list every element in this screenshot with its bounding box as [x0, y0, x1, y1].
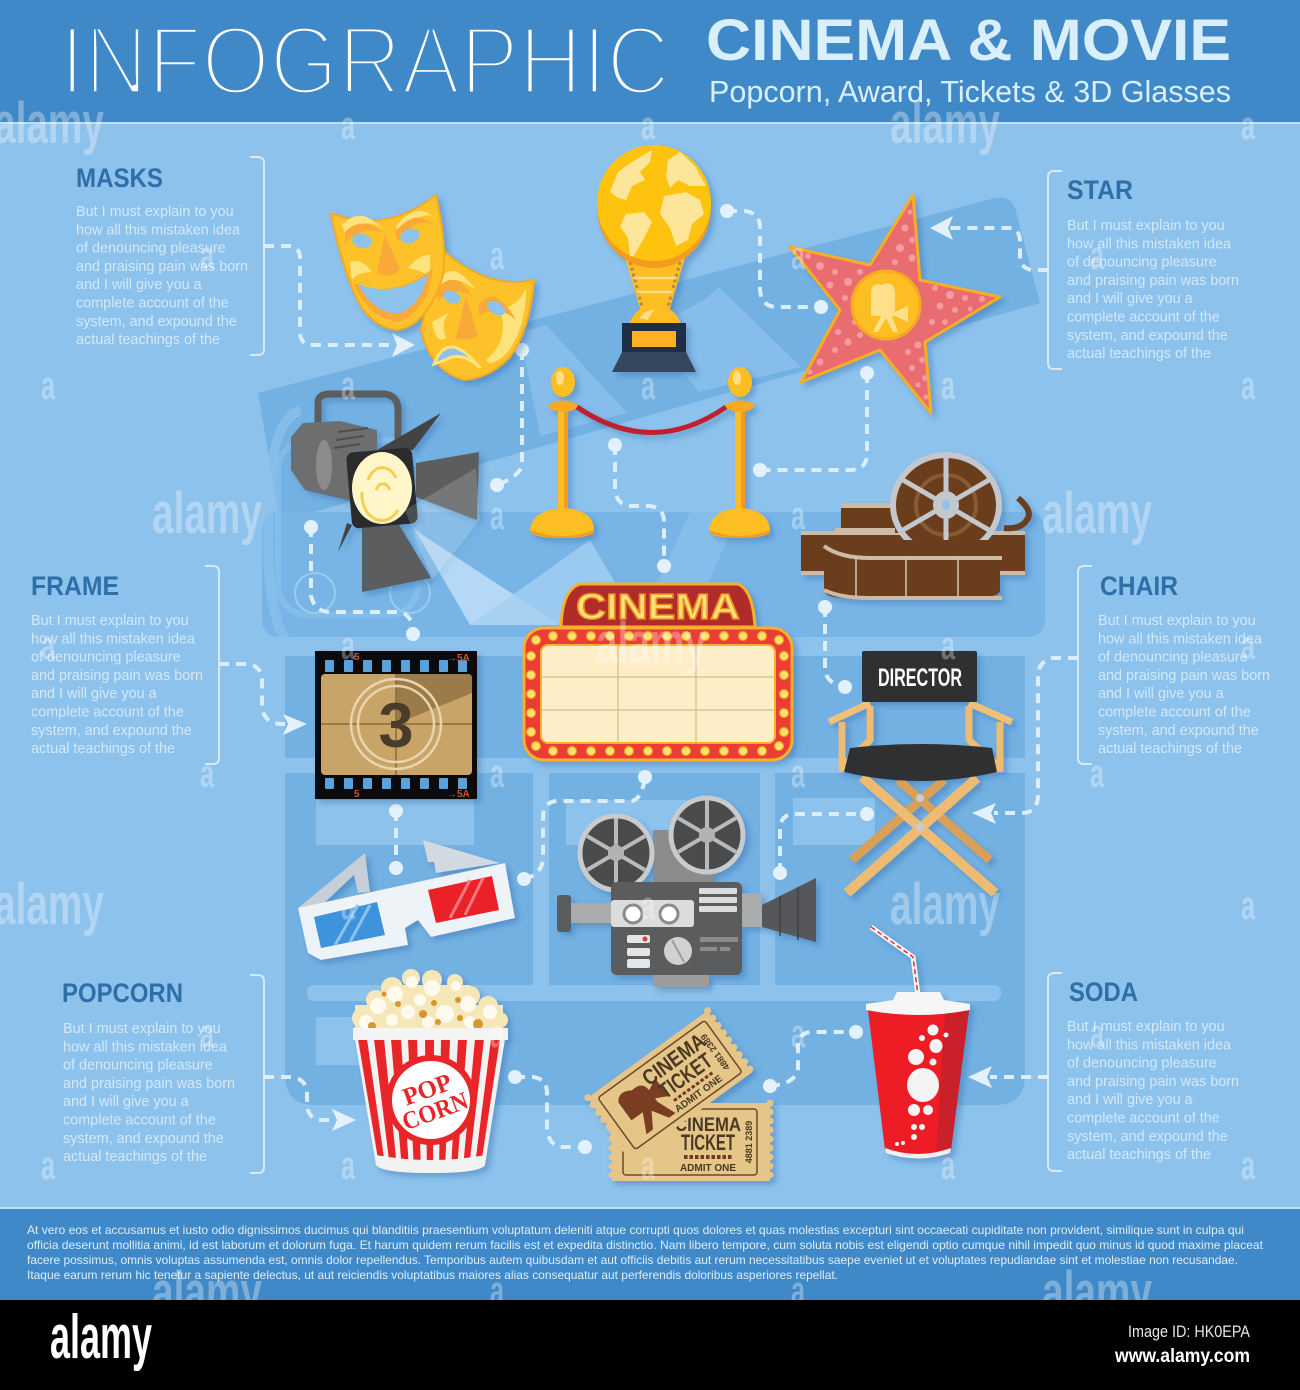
watermark layer: a: [791, 234, 805, 278]
upper ticket: ADMIT ONE: [673, 1073, 725, 1115]
text block: star: [1048, 171, 1239, 369]
watermark layer: alamy: [1042, 1260, 1152, 1325]
text block: soda: and I will give you a: [1067, 1092, 1193, 1108]
connector: popcorn to tickets: [508, 1070, 592, 1154]
bucket label: POP: [399, 1069, 456, 1111]
footer band: [0, 1207, 1300, 1300]
text block: soda: But I must explain to you: [1067, 1019, 1225, 1035]
icon: director chair: [829, 651, 1012, 893]
text block: chair: how all this mistaken idea: [1098, 631, 1262, 647]
watermark layer: a: [1241, 884, 1255, 928]
text block: masks: and I will give you a: [76, 277, 202, 293]
watermark layer: a: [41, 1144, 55, 1188]
bucket label: [391, 1066, 472, 1136]
connector: trophy to star: [720, 204, 828, 314]
connector: film reel to chair: [818, 600, 852, 694]
text block: star: of denouncing pleasure: [1067, 255, 1217, 271]
image id: Image ID: HK0EPA: [1128, 1322, 1251, 1341]
watermark layer: a: [41, 624, 55, 668]
globe continents: [610, 150, 706, 256]
watermark layer: a: [1090, 1012, 1104, 1056]
footer text: Itaque earum rerum hic tenetur a sapiente delectus, ut aut reiciendis voluptatibus maiores alias consequatur aut perferendis doloribus asperiores repellat.: [27, 1268, 838, 1282]
cup bubbles: [895, 1024, 948, 1146]
arrow: masks connector: [264, 246, 415, 357]
text block: masks: MASKS: [76, 163, 163, 193]
watermark layer: a: [941, 624, 955, 668]
marquee panel: [541, 645, 775, 743]
watermark layer: a: [1241, 104, 1255, 148]
arrow: popcorn connector: [264, 1077, 356, 1131]
watermark layer: a: [341, 364, 355, 408]
text block: popcorn: [62, 975, 264, 1173]
text block: frame: [31, 566, 219, 764]
text block: chair: [1078, 566, 1270, 764]
watermark layer: a: [200, 752, 214, 796]
text block: soda: [1048, 973, 1239, 1171]
header band: [0, 0, 1300, 124]
watermark layer: alamy: [1042, 481, 1152, 546]
upper ticket: TICKET: [654, 1048, 717, 1103]
text block: chair: complete account of the: [1098, 704, 1251, 720]
right post: [709, 367, 770, 538]
text block: frame: and I will give you a: [31, 686, 157, 702]
text block: star: and praising pain was born: [1067, 273, 1239, 289]
icon: cinema marquee sign: [524, 584, 792, 760]
watermark layer: a: [341, 104, 355, 148]
watermark layer: a: [490, 752, 504, 796]
text block: star: But I must explain to you: [1067, 218, 1225, 234]
icon: film countdown frame: 3: [378, 691, 414, 761]
connector: masks to spotlight: [490, 343, 529, 492]
text block: masks: how all this mistaken idea: [76, 222, 240, 238]
footer text: [27, 1223, 1264, 1282]
watermark layer: a: [791, 1269, 805, 1313]
website: www.alamy.com: [1114, 1346, 1250, 1367]
text block: popcorn: system, and expound the: [63, 1131, 224, 1147]
watermark layer: alamy: [152, 481, 262, 546]
connector: frame to glasses: [389, 804, 403, 875]
reels: [580, 798, 743, 890]
bucket label: CORN: [399, 1087, 472, 1136]
red rope: [577, 407, 726, 432]
watermark layer: a: [1241, 624, 1255, 668]
text block: frame: FRAME: [31, 571, 119, 601]
text block: masks: of denouncing pleasure: [76, 241, 226, 257]
text block: frame: how all this mistaken idea: [31, 631, 195, 647]
watermark layer: a: [641, 1144, 655, 1188]
text block: popcorn: actual teachings of the: [63, 1149, 207, 1165]
text block: star: system, and expound the: [1067, 328, 1228, 344]
watermark layer: a: [1241, 364, 1255, 408]
text block: soda: how all this mistaken idea: [1067, 1037, 1231, 1053]
upper ticket: CINEMA: [637, 1028, 710, 1091]
text block: star: complete account of the: [1067, 310, 1220, 326]
text block: popcorn: and praising pain was born: [63, 1076, 235, 1092]
watermark layer: a: [1241, 1144, 1255, 1188]
icon: spotlight: [291, 394, 480, 592]
text block: popcorn: But I must explain to you: [63, 1021, 221, 1037]
watermark layer: alamy: [890, 91, 1000, 156]
watermark layer: a: [200, 234, 214, 278]
watermark layer: a: [341, 1144, 355, 1188]
icon: film countdown frame: 5: [354, 789, 360, 800]
lower ticket: CINEMA: [675, 1115, 741, 1136]
text block: masks: and praising pain was born: [76, 259, 248, 275]
alamy logo: alamy: [50, 1303, 152, 1372]
text block: star: actual teachings of the: [1067, 346, 1211, 362]
watermark layer: a: [1090, 234, 1104, 278]
marquee bulbs: [526, 632, 788, 756]
sign title: CINEMA: [576, 586, 740, 627]
text block: frame: But I must explain to you: [31, 613, 189, 629]
icon: 3D glasses: [298, 840, 515, 960]
text block: soda: of denouncing pleasure: [1067, 1056, 1217, 1072]
watermark layer: a: [41, 364, 55, 408]
text block: masks: But I must explain to you: [76, 204, 234, 220]
lower ticket: TICKET: [681, 1130, 735, 1155]
text block: masks: system, and expound the: [76, 314, 237, 330]
watermark layer: a: [641, 104, 655, 148]
icon: film countdown frame: →5A: [447, 789, 470, 800]
footer text: At vero eos et accusamus et iusto odio dignissimos ducimus qui blanditiis praesentium voluptatum deleniti atque corrupti quos dolores et quas molestias excepturi sint occaecati cupiditate non provident, similique sunt in culpa qui: [27, 1223, 1244, 1237]
watermark layer: a: [490, 234, 504, 278]
connector: spotlight to frame: [304, 520, 420, 641]
watermark layer: a: [200, 1012, 214, 1056]
popcorn pile: [352, 969, 508, 1030]
watermark layer: a: [791, 752, 805, 796]
text block: chair: actual teachings of the: [1098, 741, 1242, 757]
text block: soda: system, and expound the: [1067, 1129, 1228, 1145]
left post: [530, 367, 594, 538]
text block: soda: and praising pain was born: [1067, 1074, 1239, 1090]
watermark layer: a: [490, 494, 504, 538]
text block: frame: of denouncing pleasure: [31, 650, 181, 666]
text block: frame: complete account of the: [31, 704, 184, 720]
text block: popcorn: and I will give you a: [63, 1094, 189, 1110]
text block: popcorn: POPCORN: [62, 978, 183, 1008]
icon: walk of fame star: [790, 195, 1000, 413]
icon: soda cup: [866, 927, 970, 1158]
text block: star: how all this mistaken idea: [1067, 236, 1231, 252]
text block: popcorn: of denouncing pleasure: [63, 1058, 213, 1074]
footer text: officia deserunt mollitia animi, id est laborum et dolorum fuga. Et harum quidem rerum facilis est et expedita distinctio. Nam libero tempore, cum soluta nobis est eligendi optio cumque nihil impedit quo minus id quod maxime placeat: [27, 1238, 1264, 1252]
connector: star to film reel: [753, 366, 874, 477]
watermark layer: a: [1090, 752, 1104, 796]
text block: popcorn: complete account of the: [63, 1112, 216, 1128]
black credit bar: [0, 1300, 1300, 1390]
watermark layer: a: [641, 364, 655, 408]
upper ticket: [588, 1011, 752, 1159]
connector: tickets to soda: [763, 1025, 863, 1093]
text block: frame: actual teachings of the: [31, 741, 175, 757]
icon: film projector: [557, 798, 816, 987]
icon: theatre masks: [331, 195, 534, 380]
watermark layer: a: [641, 884, 655, 928]
text block: frame: and praising pain was born: [31, 668, 203, 684]
icon: rope stanchions: [530, 367, 770, 538]
text block: soda: complete account of the: [1067, 1110, 1220, 1126]
icon: film countdown frame: →5A: [447, 653, 470, 664]
watermark layer: a: [341, 624, 355, 668]
connector: glasses to cinema sign: [517, 770, 652, 886]
icon: golden globe trophy: [597, 145, 711, 372]
text block: chair: But I must explain to you: [1098, 613, 1256, 629]
watermark layer: a: [791, 494, 805, 538]
watermark layer: a: [791, 1012, 805, 1056]
connector: projector to chair: [773, 807, 874, 880]
icon: cinema tickets: [588, 1011, 770, 1181]
text block: chair: of denouncing pleasure: [1098, 650, 1248, 666]
watermark layer: a: [941, 364, 955, 408]
connector: stanchions to cinema sign: [608, 438, 671, 573]
icon: popcorn bucket: [352, 969, 508, 1173]
title: infographic: INFOGRAPHIC: [60, 6, 670, 115]
arrow: frame connector: [219, 664, 307, 735]
clapperboard background: [258, 197, 1045, 1105]
text block: popcorn: how all this mistaken idea: [63, 1039, 227, 1055]
icon: film countdown frame: 5: [354, 652, 360, 663]
lower ticket: 4881 2389: [744, 1121, 754, 1163]
text block: chair: CHAIR: [1100, 571, 1178, 601]
text block: soda: actual teachings of the: [1067, 1147, 1211, 1163]
text block: star: and I will give you a: [1067, 291, 1193, 307]
upper ticket: 4881 2389: [699, 1032, 732, 1072]
arrow: soda connector: [968, 1066, 1048, 1088]
chair label: DIRECTOR: [878, 664, 962, 692]
text block: chair: and I will give you a: [1098, 686, 1224, 702]
watermark layer: a: [490, 1012, 504, 1056]
sad mask: [421, 253, 534, 380]
happy mask: [331, 195, 444, 330]
watermark layer: alamy: [890, 872, 1000, 937]
text block: masks: complete account of the: [76, 296, 229, 312]
text block: soda: SODA: [1069, 977, 1138, 1007]
watermark layer: alamy: [596, 611, 706, 676]
icon: film reel: [801, 455, 1029, 598]
watermark layer: a: [341, 884, 355, 928]
text block: chair: and praising pain was born: [1098, 668, 1270, 684]
arrow: chair connector: [972, 658, 1078, 824]
text block: masks: actual teachings of the: [76, 332, 220, 348]
subtitle: Popcorn, Award, Tickets & 3D Glasses: [709, 74, 1231, 109]
lower ticket: [612, 1103, 770, 1181]
watermark layer: a: [490, 1269, 504, 1313]
text block: frame: system, and expound the: [31, 723, 192, 739]
text block: chair: system, and expound the: [1098, 723, 1259, 739]
text block: masks: [76, 157, 264, 355]
watermark layer: alamy: [152, 1260, 262, 1325]
text block: star: STAR: [1067, 175, 1133, 205]
arrow: star connector: [930, 216, 1048, 270]
watermark layer: a: [941, 1144, 955, 1188]
icon: film countdown frame: [315, 651, 477, 800]
footer text: facere possimus, omnis voluptas assumenda est, omnis dolor repellendus. Temporibus autem quibusdam et aut officiis debitis aut rerum necessitatibus saepe eveniet ut et voluptates repudiandae sint et molestiae non recusandae.: [27, 1253, 1238, 1267]
title: cinema and movie: CINEMA & MOVIE: [706, 8, 1231, 73]
lower ticket: ADMIT ONE: [680, 1163, 736, 1174]
